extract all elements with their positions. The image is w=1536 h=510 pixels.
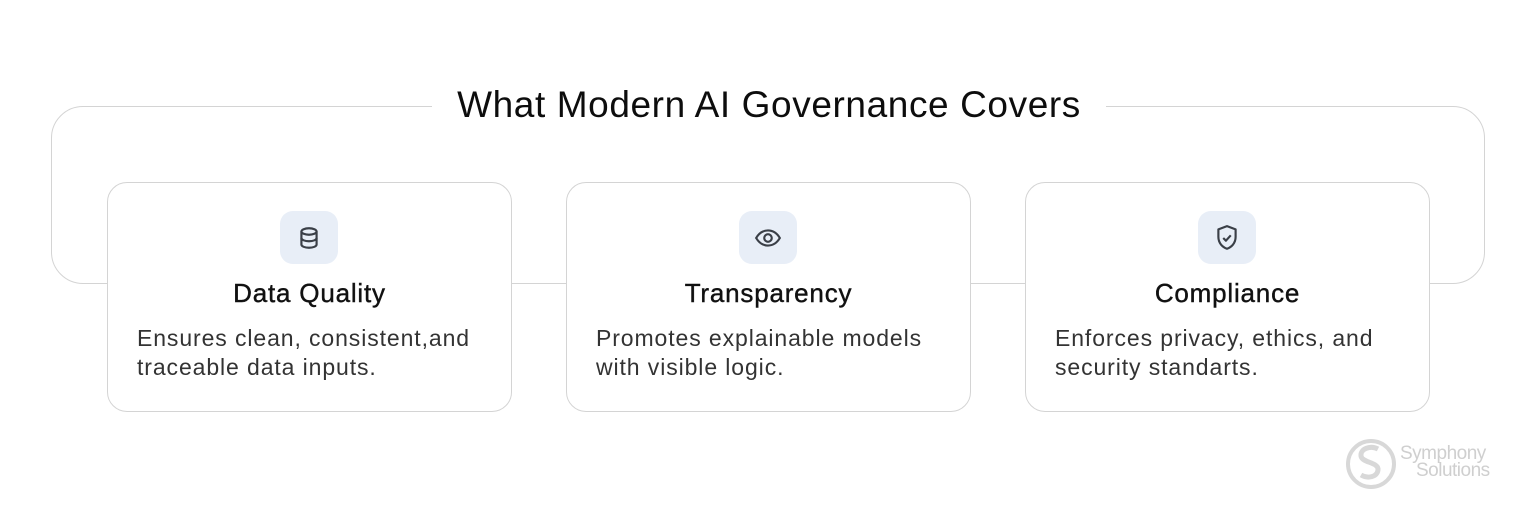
icon: shield	[1198, 211, 1256, 264]
text: security standarts.	[1055, 354, 1259, 380]
logo	[1346, 439, 1490, 489]
heading: Compliance	[1155, 278, 1300, 308]
icon: database	[280, 211, 338, 264]
text: with visible logic.	[596, 354, 784, 380]
icon: eye	[739, 211, 797, 264]
text: Promotes explainable models	[596, 325, 922, 351]
text: Enforces privacy, ethics, and	[1055, 325, 1373, 351]
title: What Modern AI Governance Covers	[457, 84, 1081, 125]
outer frame	[51, 106, 1485, 284]
logo: Symphony	[1400, 443, 1487, 464]
text	[137, 325, 470, 380]
text	[1055, 325, 1373, 380]
text: Ensures clean, consistent,and	[137, 325, 470, 351]
panel: data quality	[107, 182, 512, 412]
logo: Solutions	[1416, 460, 1490, 481]
text: traceable data inputs.	[137, 354, 377, 380]
text	[596, 325, 922, 380]
panel: transparency	[566, 182, 971, 412]
panel: compliance	[1025, 182, 1430, 412]
heading: Transparency	[685, 278, 852, 308]
heading: Data Quality	[233, 278, 386, 308]
